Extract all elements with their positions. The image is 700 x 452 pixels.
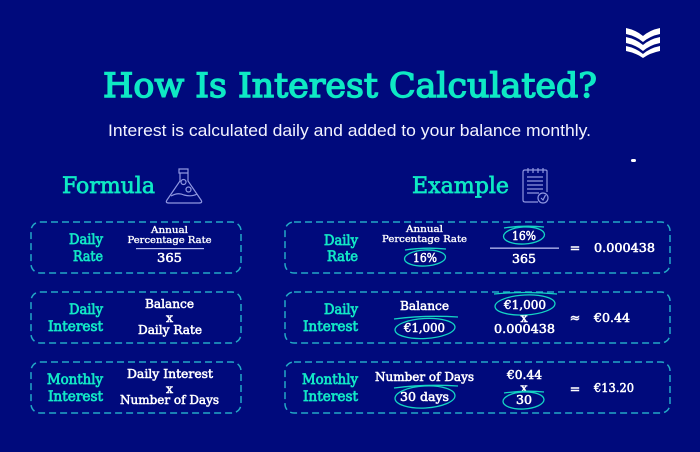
formula: annual percentage rate over 365: 365 xyxy=(157,250,182,265)
result: approx 0.44: ≈ xyxy=(570,310,580,325)
label: monthly interest: Monthly xyxy=(47,372,103,388)
panel: example daily rate xyxy=(285,222,670,273)
calculation: 1000 x 0.000438: €1,000 xyxy=(503,297,546,312)
label: daily interest: Daily xyxy=(69,302,103,318)
label: daily interest: Interest xyxy=(48,319,104,335)
panel: example daily interest xyxy=(285,292,670,343)
label: daily interest xyxy=(303,302,359,335)
decorative dot xyxy=(631,159,636,162)
result: approx 0.44 xyxy=(570,310,630,325)
label: monthly interest: Interest xyxy=(303,389,359,405)
result: approx 0.44: €0.44 xyxy=(593,310,630,325)
calculation: 0.44 x 30: 30 xyxy=(516,392,532,407)
result: equals 0.000438: 0.000438 xyxy=(594,240,655,255)
panel: formula daily rate xyxy=(31,222,241,273)
calculation: 16% over 365 xyxy=(490,226,559,266)
calculation: 16% over 365: 16% xyxy=(512,228,536,243)
formula: daily interest x number of days: Daily Interest xyxy=(127,366,213,381)
label: monthly interest xyxy=(47,372,104,405)
panel: formula daily interest xyxy=(31,292,241,343)
definition: annual percentage rate 16%: Percentage Rate xyxy=(382,234,467,245)
label: daily rate: Rate xyxy=(73,249,103,265)
subtitle: Interest is calculated daily and added to your balance monthly. xyxy=(108,121,591,140)
result: equals 13.20 xyxy=(570,380,634,396)
heading: Example: Example xyxy=(412,174,509,199)
formula: daily interest x number of days: x xyxy=(166,381,173,396)
formula: balance x daily rate xyxy=(138,296,202,337)
result: equals 13.20: = xyxy=(570,381,580,396)
formula: daily interest x number of days: Number of Days xyxy=(120,392,219,407)
formula: balance x daily rate: Balance xyxy=(145,296,194,311)
calculation: 1000 x 0.000438: x xyxy=(520,310,528,325)
label: monthly interest: Interest xyxy=(48,389,104,405)
definition: number of days 30: 30 days xyxy=(400,389,449,404)
panel: formula monthly interest xyxy=(31,362,241,413)
label: daily interest xyxy=(48,302,104,335)
label: daily interest: Daily xyxy=(324,302,358,318)
result: equals 13.20: €13.20 xyxy=(593,380,634,395)
calculation: 0.44 x 30 xyxy=(503,367,544,410)
icon: flask xyxy=(166,169,202,203)
panel: example monthly interest xyxy=(285,362,670,413)
formula: balance x daily rate: Daily Rate xyxy=(138,322,202,337)
definition: balance 1000: €1,000 xyxy=(403,320,445,335)
label: daily rate: Rate xyxy=(327,249,358,265)
definition: annual percentage rate 16% xyxy=(382,224,467,267)
label: daily interest: Interest xyxy=(303,319,359,335)
title: How Is Interest Calculated? xyxy=(103,66,597,106)
label: monthly interest: Monthly xyxy=(302,372,358,388)
icon: notepad xyxy=(523,168,548,203)
calculation: 0.44 x 30: €0.44 xyxy=(506,367,542,382)
label: daily rate xyxy=(69,232,103,265)
calculation: 16% over 365: 365 xyxy=(512,251,536,266)
formula: daily interest x number of days xyxy=(120,366,219,407)
definition: number of days 30 xyxy=(375,369,474,410)
icon: logo chevrons xyxy=(626,28,660,58)
formula: annual percentage rate over 365: Percentage Rate xyxy=(128,235,212,246)
definition: annual percentage rate 16%: 16% xyxy=(413,250,437,265)
definition: annual percentage rate 16%: Annual xyxy=(405,224,443,235)
calculation: 1000 x 0.000438: 0.000438 xyxy=(494,321,555,336)
definition: balance 1000 xyxy=(394,298,458,340)
definition: balance 1000: Balance xyxy=(400,298,449,313)
calculation: 1000 x 0.000438 xyxy=(494,292,557,336)
calculation: 0.44 x 30: x xyxy=(520,380,528,395)
result: equals 0.000438 xyxy=(570,240,655,255)
definition: number of days 30: Number of Days xyxy=(375,369,474,384)
label: daily rate: Daily xyxy=(324,233,358,249)
formula: annual percentage rate over 365 xyxy=(128,225,212,265)
label: monthly interest xyxy=(302,372,359,405)
heading: Formula: Formula xyxy=(62,174,155,199)
label: daily rate: Daily xyxy=(69,232,103,248)
label: daily rate xyxy=(324,233,358,265)
formula: annual percentage rate over 365: Annual xyxy=(150,225,188,236)
formula: balance x daily rate: x xyxy=(166,310,173,325)
result: equals 0.000438: = xyxy=(570,240,580,255)
